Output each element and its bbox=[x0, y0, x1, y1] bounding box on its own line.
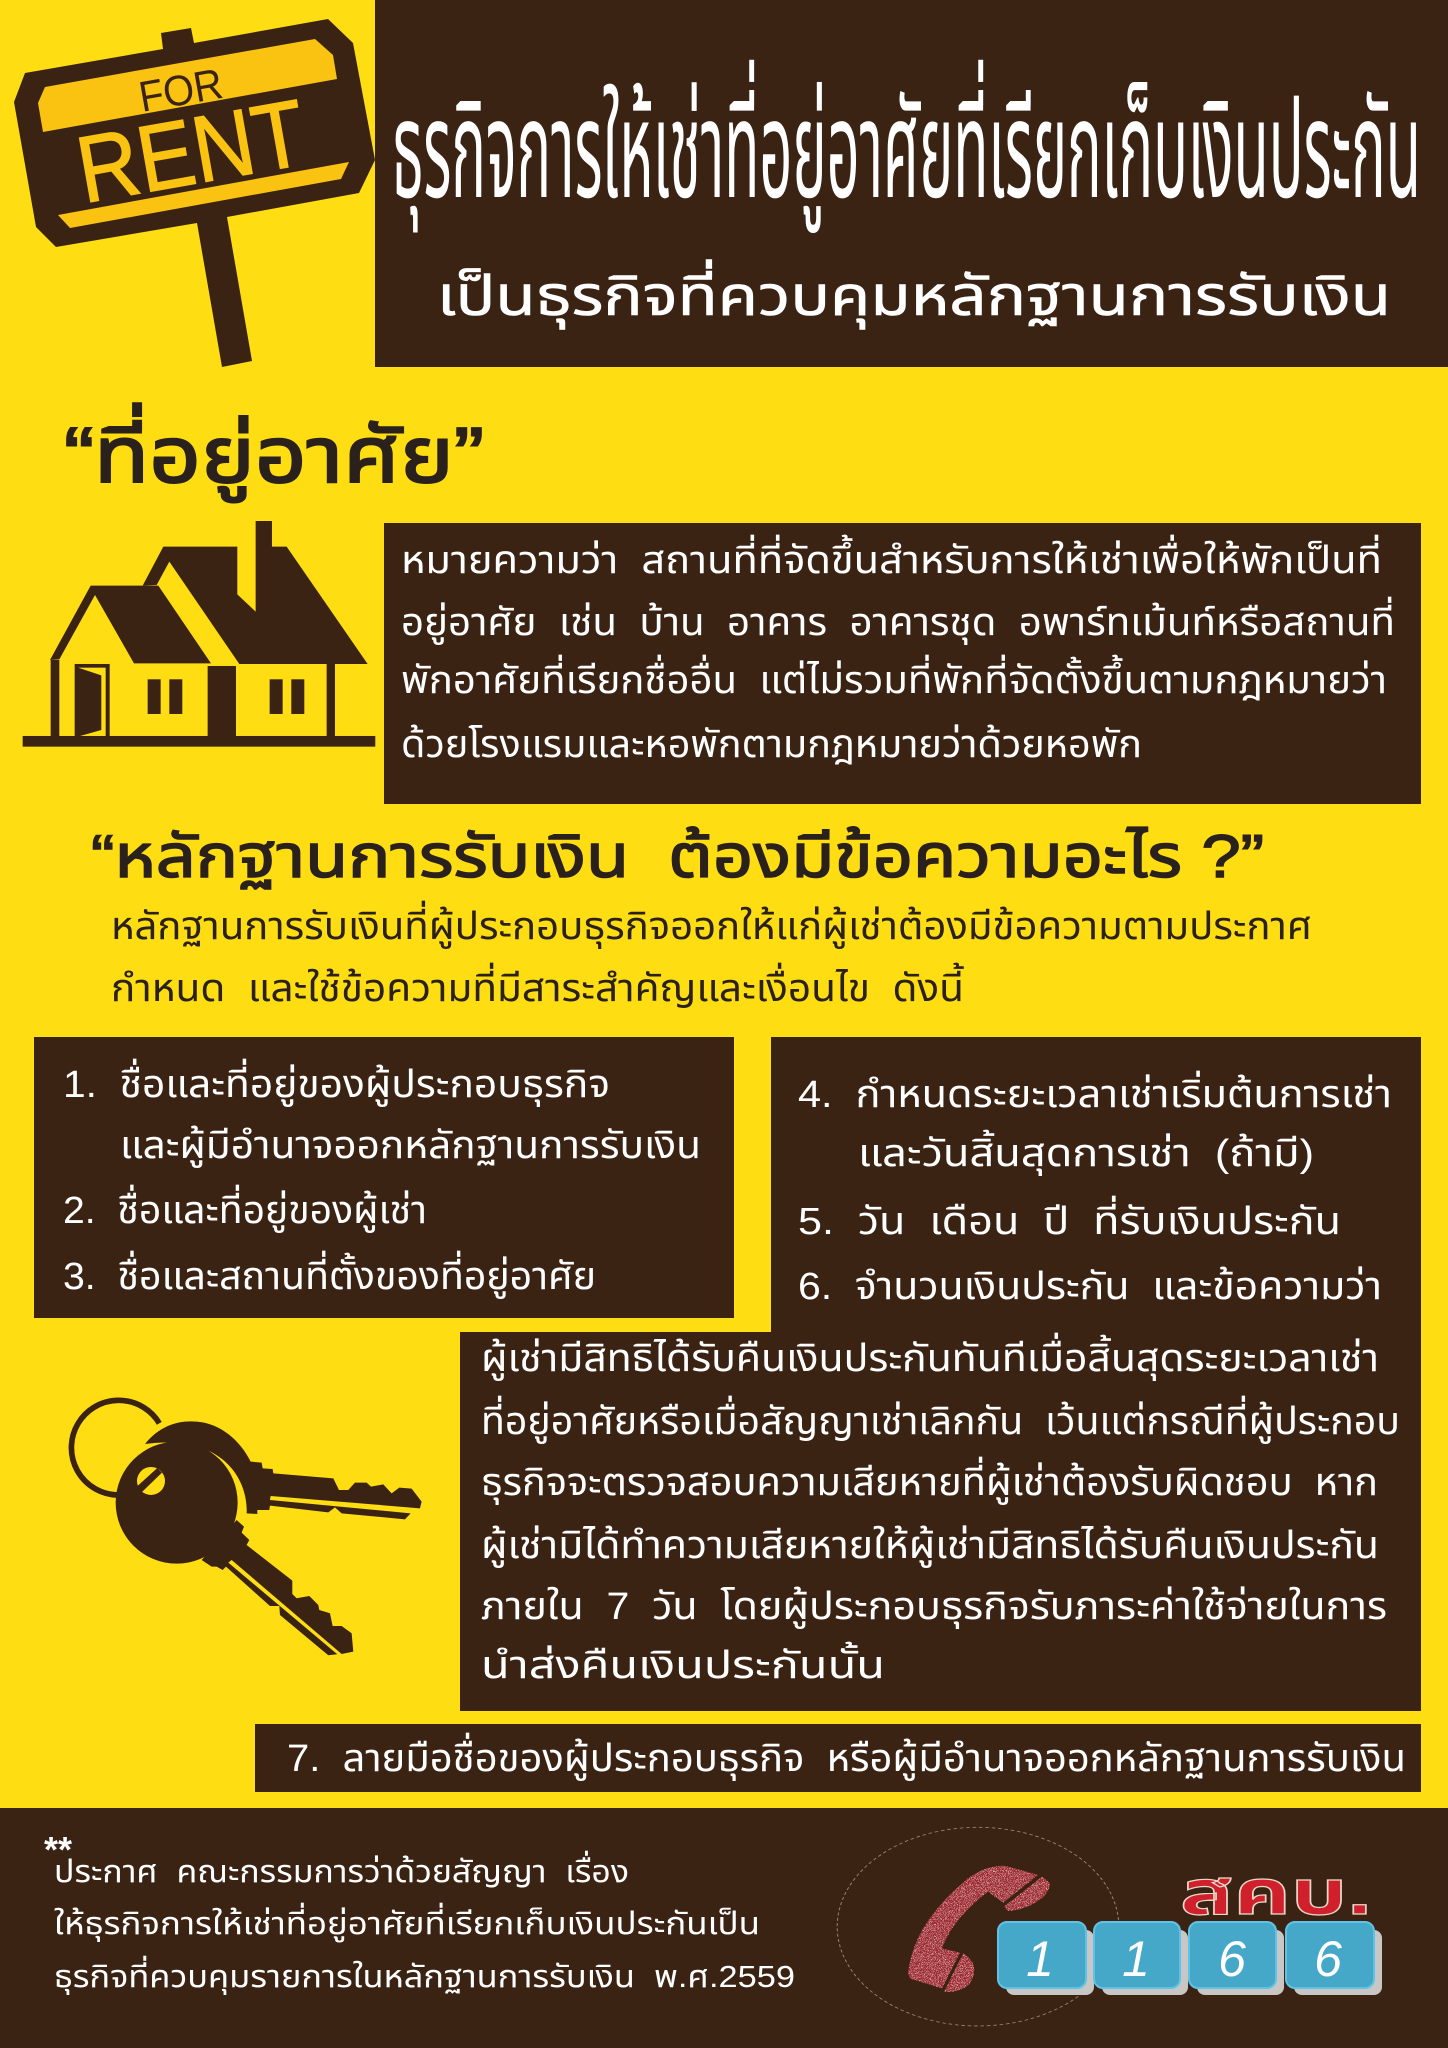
footnote text: ให้ธุรกิจการให้เช่าที่อยู่อาศัยที่เรียกเก็บเงินประกันเป็น bbox=[54, 1902, 760, 1942]
panel: residence definition: หมายความว่า สถานที่ที่จัดขึ้นสำหรับการให้เช่าเพื่อให้พักเป็นที่ bbox=[401, 534, 1382, 582]
hotline keys 1166: 6 bbox=[1314, 1931, 1342, 1987]
panel: residence definition bbox=[384, 523, 1421, 804]
panel: item 7 bbox=[255, 1724, 1421, 1792]
logo text: สคบ. bbox=[1180, 1859, 1372, 1928]
hotline keys 1166: 1 bbox=[1122, 1931, 1150, 1987]
icon: keys bbox=[71, 1400, 422, 1655]
panel: footer bbox=[0, 1808, 1448, 2048]
panel: items 4 to 6: 5. วัน เดือน ปี ที่รับเงินประกัน bbox=[798, 1195, 1341, 1243]
hotline keys 1166: 6 bbox=[1218, 1931, 1246, 1987]
subtitle: เป็นธุรกิจที่ควบคุมหลักฐานการรับเงิน bbox=[437, 259, 1391, 329]
panel: residence definition: ด้วยโรงแรมและหอพักตามกฎหมายว่าด้วยหอพัก bbox=[401, 724, 1142, 766]
text block: intro paragraph: กำหนด และใช้ข้อความที่มีสาระสำคัญและเงื่อนไข ดังนี้ bbox=[111, 962, 964, 1010]
panel: residence definition: อยู่อาศัย เช่น บ้าน อาคาร อาคารชุด อพาร์ทเม้นท์หรือสถานที่ bbox=[401, 596, 1395, 645]
panel: items 4 to 6: ผู้เช่ามิได้ทำความเสียหายให้ผู้เช่ามีสิทธิได้รับคืนเงินประกัน bbox=[481, 1525, 1379, 1568]
panel: residence definition: พักอาศัยที่เรียกชื่ออื่น แต่ไม่รวมที่พักที่จัดตั้งขึ้นตามกฎหมายว่า bbox=[401, 654, 1387, 702]
panel: items 4 to 6: 6. จำนวนเงินประกัน และข้อความว่า bbox=[798, 1266, 1382, 1308]
panel: items 1 to 3 bbox=[34, 1037, 734, 1318]
hotline keys 1166 bbox=[998, 1922, 1382, 1995]
text block: intro paragraph: หลักฐานการรับเงินที่ผู้ประกอบธุรกิจออกให้แก่ผู้เช่าต้องมีข้อความตามประกาศ bbox=[111, 900, 1312, 949]
heading: residence: “ที่อยู่อาศัย” bbox=[64, 403, 484, 503]
icon: telephone hotline bbox=[837, 1827, 1119, 2026]
panel: items 4 to 6: และวันสิ้นสุดการเช่า (ถ้ามี) bbox=[858, 1129, 1314, 1176]
panel: item 7: 7. ลายมือชื่อของผู้ประกอบธุรกิจ หรือผู้มีอำนาจออกหลักฐานการรับเงิน bbox=[287, 1732, 1406, 1781]
panel: items 1 to 3: 3. ชื่อและสถานที่ตั้งของที่อยู่อาศัย bbox=[63, 1250, 596, 1299]
footnote text bbox=[44, 1829, 795, 1995]
panel: items 1 to 3: 2. ชื่อและที่อยู่ของผู้เช่า bbox=[63, 1184, 427, 1233]
panel: items 4 to 6: ธุรกิจจะตรวจสอบความเสียหายที่ผู้เช่าต้องรับผิดชอบ หาก bbox=[481, 1456, 1378, 1505]
footnote text: ธุรกิจที่ควบคุมรายการในหลักฐานการรับเงิน พ.ศ.2559 bbox=[54, 1955, 795, 1995]
panel: items 1 to 3: และผู้มีอำนาจออกหลักฐานการรับเงิน bbox=[120, 1125, 701, 1168]
sign text: for rent: RENT bbox=[69, 80, 313, 223]
hotline keys 1166: 1 bbox=[1026, 1931, 1054, 1987]
panel: items 4 to 6 bbox=[460, 1037, 1421, 1711]
sign text: for rent: FOR bbox=[135, 60, 226, 122]
icon: for rent sign bbox=[14, 19, 375, 367]
panel: items 1 to 3: 1. ชื่อและที่อยู่ของผู้ประกอบธุรกิจ bbox=[63, 1058, 610, 1107]
icon: house bbox=[23, 521, 375, 747]
panel: items 4 to 6: ผู้เช่ามีสิทธิได้รับคืนเงินประกันทันทีเมื่อสิ้นสุดระยะเวลาเช่า bbox=[481, 1332, 1379, 1381]
panel: items 4 to 6: 4. กำหนดระยะเวลาเช่าเริ่มต้นการเช่า bbox=[798, 1070, 1392, 1116]
footnote text: ประกาศ คณะกรรมการว่าด้วยสัญญา เรื่อง bbox=[54, 1850, 629, 1889]
panel: items 4 to 6: ภายใน 7 วัน โดยผู้ประกอบธุรกิจรับภาระค่าใช้จ่ายในการ bbox=[481, 1586, 1387, 1629]
text block: intro paragraph bbox=[111, 900, 1312, 1010]
footnote text: ** bbox=[44, 1829, 72, 1870]
heading: receipt question: “หลักฐานการรับเงิน ต้องมีข้อความอะไร ?” bbox=[91, 823, 1264, 890]
panel: title banner bbox=[375, 0, 1448, 367]
panel: items 4 to 6: ที่อยู่อาศัยหรือเมื่อสัญญาเช่าเลิกกัน เว้นแต่กรณีที่ผู้ประกอบ bbox=[481, 1395, 1400, 1444]
panel: items 4 to 6: นำส่งคืนเงินประกันนั้น bbox=[481, 1641, 885, 1687]
